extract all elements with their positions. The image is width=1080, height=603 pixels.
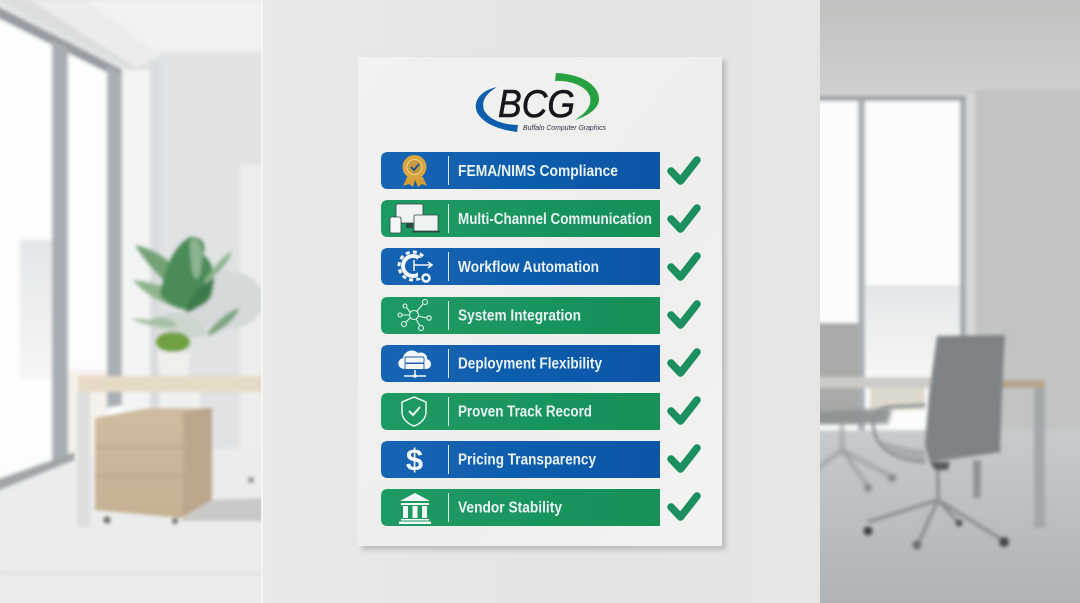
center wall bbox=[262, 0, 820, 603]
icon: gear automation bbox=[399, 252, 432, 282]
check 8 bbox=[671, 496, 697, 517]
row: Pricing Transparency: Pricing Transparency bbox=[458, 452, 596, 468]
sign panel bbox=[358, 57, 722, 546]
row: Vendor Stability: Vendor Stability bbox=[458, 500, 562, 516]
left office background bbox=[0, 0, 270, 603]
row: Workflow Automation: Workflow Automation bbox=[458, 259, 599, 276]
logo letters: BCG bbox=[498, 83, 575, 126]
icon: network hub bbox=[398, 300, 431, 330]
icon: devices bbox=[390, 204, 440, 233]
check 5 bbox=[671, 352, 697, 373]
row: Workflow Automation bbox=[381, 248, 660, 285]
row: Deployment Flexibility: Deployment Flexibility bbox=[458, 356, 602, 372]
check 4 bbox=[671, 304, 697, 325]
plant bbox=[130, 237, 264, 378]
row: FEMA/NIMS Compliance bbox=[381, 152, 660, 189]
icon: cloud server bbox=[398, 351, 431, 378]
check 7 bbox=[671, 448, 697, 469]
desk and cabinet bbox=[77, 376, 268, 527]
row: System Integration: System Integration bbox=[458, 308, 581, 324]
row: Proven Track Record bbox=[381, 393, 660, 430]
row: Vendor Stability bbox=[381, 489, 660, 526]
icon: dollar sign: $ bbox=[406, 442, 423, 477]
icon: shield check bbox=[402, 397, 426, 426]
BCG logo bbox=[476, 73, 606, 132]
row: Pricing Transparency bbox=[381, 441, 660, 478]
chairs bbox=[812, 408, 896, 492]
green swoosh bbox=[555, 73, 599, 120]
blue swoosh bbox=[476, 87, 518, 132]
icon: bank building bbox=[399, 493, 431, 524]
row: Multi-Channel Communication bbox=[381, 200, 660, 237]
check 6 bbox=[671, 400, 697, 421]
row: Multi-Channel Communication: Multi-Channel Communication bbox=[458, 211, 652, 228]
check 3 bbox=[671, 256, 697, 277]
check 1 bbox=[671, 160, 697, 181]
row: Deployment Flexibility bbox=[381, 345, 660, 382]
icon: award badge bbox=[402, 155, 427, 187]
row: FEMA/NIMS Compliance: FEMA/NIMS Compliance bbox=[458, 163, 618, 180]
row: System Integration bbox=[381, 297, 660, 334]
check 2 bbox=[671, 208, 697, 229]
right office background bbox=[812, 0, 1080, 603]
sign shadow bbox=[362, 60, 726, 550]
logo tagline: Buffalo Computer Graphics bbox=[523, 123, 606, 132]
row: Proven Track Record: Proven Track Record bbox=[458, 404, 592, 420]
